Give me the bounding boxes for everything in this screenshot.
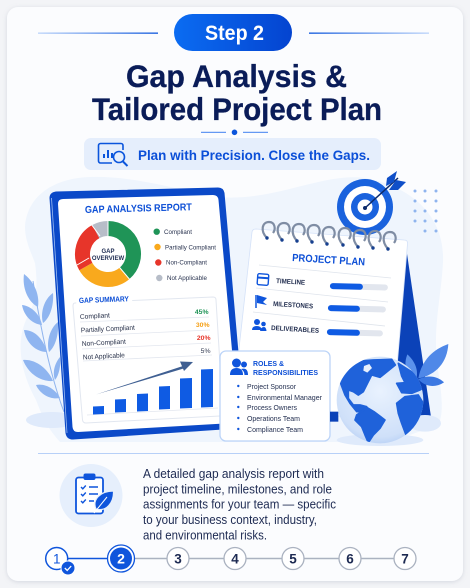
gap summary panel: 30% (196, 322, 210, 329)
icon: clipboard with leaf (60, 464, 122, 527)
continents (340, 359, 425, 443)
roles heading (253, 359, 318, 377)
tablet: gap analysis report (50, 188, 244, 439)
gap summary panel (73, 294, 223, 423)
gap summary panel: 20% (197, 335, 210, 342)
description text (143, 467, 336, 542)
gap summary panel: Not Applicable (83, 352, 125, 361)
step 1 complete: 1 (53, 552, 60, 566)
row: deliverables: DELIVERABLES (271, 325, 320, 335)
description text: A detailed gap analysis report with (143, 467, 324, 481)
icon: people (230, 358, 248, 375)
title (92, 58, 382, 127)
row: milestones (256, 295, 386, 313)
row: deliverables (252, 319, 383, 336)
gap summary panel: Non-Compliant (82, 339, 126, 348)
roles list: Operations Team (247, 414, 300, 423)
step 2 active (108, 545, 134, 572)
gap summary panel: 45% (195, 309, 208, 316)
header: step badge: Step 2 (205, 22, 264, 45)
desk calendar: project plan (232, 222, 431, 418)
tagline banner: Plan with Precision. Close the Gaps. (138, 148, 370, 163)
gap summary panel: Compliant (80, 312, 110, 321)
step progress tracker: 7 (401, 552, 409, 566)
trend arrow (96, 362, 193, 394)
description text: to your business context, industry, (143, 513, 317, 527)
donut legend: Not Applicable (167, 275, 207, 282)
roles list (237, 382, 323, 434)
roles and responsibilities card (220, 351, 330, 441)
tagline banner (84, 138, 381, 170)
globe with leaves (330, 344, 448, 446)
donut legend: Compliant (164, 229, 192, 236)
target icon (337, 171, 406, 235)
step 1 complete (46, 548, 75, 575)
leaves (405, 344, 448, 386)
report heading: GAP ANALYSIS REPORT (85, 202, 192, 216)
dot grid (414, 190, 438, 232)
roles list: Project Sponsor (247, 382, 297, 391)
title: Gap Analysis & (126, 58, 347, 94)
step 2 active: 2 (117, 550, 125, 566)
roles list: Compliance Team (247, 425, 303, 434)
section divider (38, 453, 429, 454)
donut chart: OVERVIEW (92, 256, 124, 262)
title: Tailored Project Plan (92, 91, 382, 127)
calendar heading: PROJECT PLAN (292, 252, 365, 268)
description text: and environmental risks. (143, 528, 267, 542)
step progress tracker: 5 (289, 552, 297, 566)
title divider (201, 130, 268, 135)
step progress tracker: 6 (346, 552, 354, 566)
description text: assignments for your team — specific (143, 498, 336, 512)
roles list: Environmental Manager (247, 393, 323, 402)
background blob (21, 177, 443, 442)
gap summary panel: GAP SUMMARY (79, 294, 129, 305)
binder rings (263, 222, 396, 249)
step progress tracker: 4 (231, 552, 239, 566)
donut legend (154, 228, 216, 282)
step progress tracker: 3 (174, 552, 182, 566)
row: timeline: TIMELINE (276, 278, 306, 287)
icon: chart with magnifier (98, 144, 128, 166)
roles heading: ROLES & (253, 359, 285, 368)
steps 3 to 7 (167, 548, 416, 570)
donut chart (77, 221, 133, 281)
donut chart: GAP (101, 249, 115, 255)
row: milestones: MILESTONES (273, 301, 314, 310)
description text: project timeline, milestones, and role (143, 482, 332, 496)
header: step badge (38, 14, 429, 51)
donut legend: Non-Compliant (166, 260, 207, 266)
row: timeline (257, 274, 388, 291)
step progress tracker (46, 545, 416, 575)
gap summary panel: 5% (201, 348, 210, 355)
donut legend: Partially Compliant (165, 244, 216, 252)
roles heading: RESPONSIBILITIES (253, 368, 318, 377)
roles list: Process Owners (247, 403, 297, 412)
rising bars (93, 369, 213, 414)
gap summary panel: Partially Compliant (81, 325, 135, 334)
decorative leaves (22, 274, 78, 428)
